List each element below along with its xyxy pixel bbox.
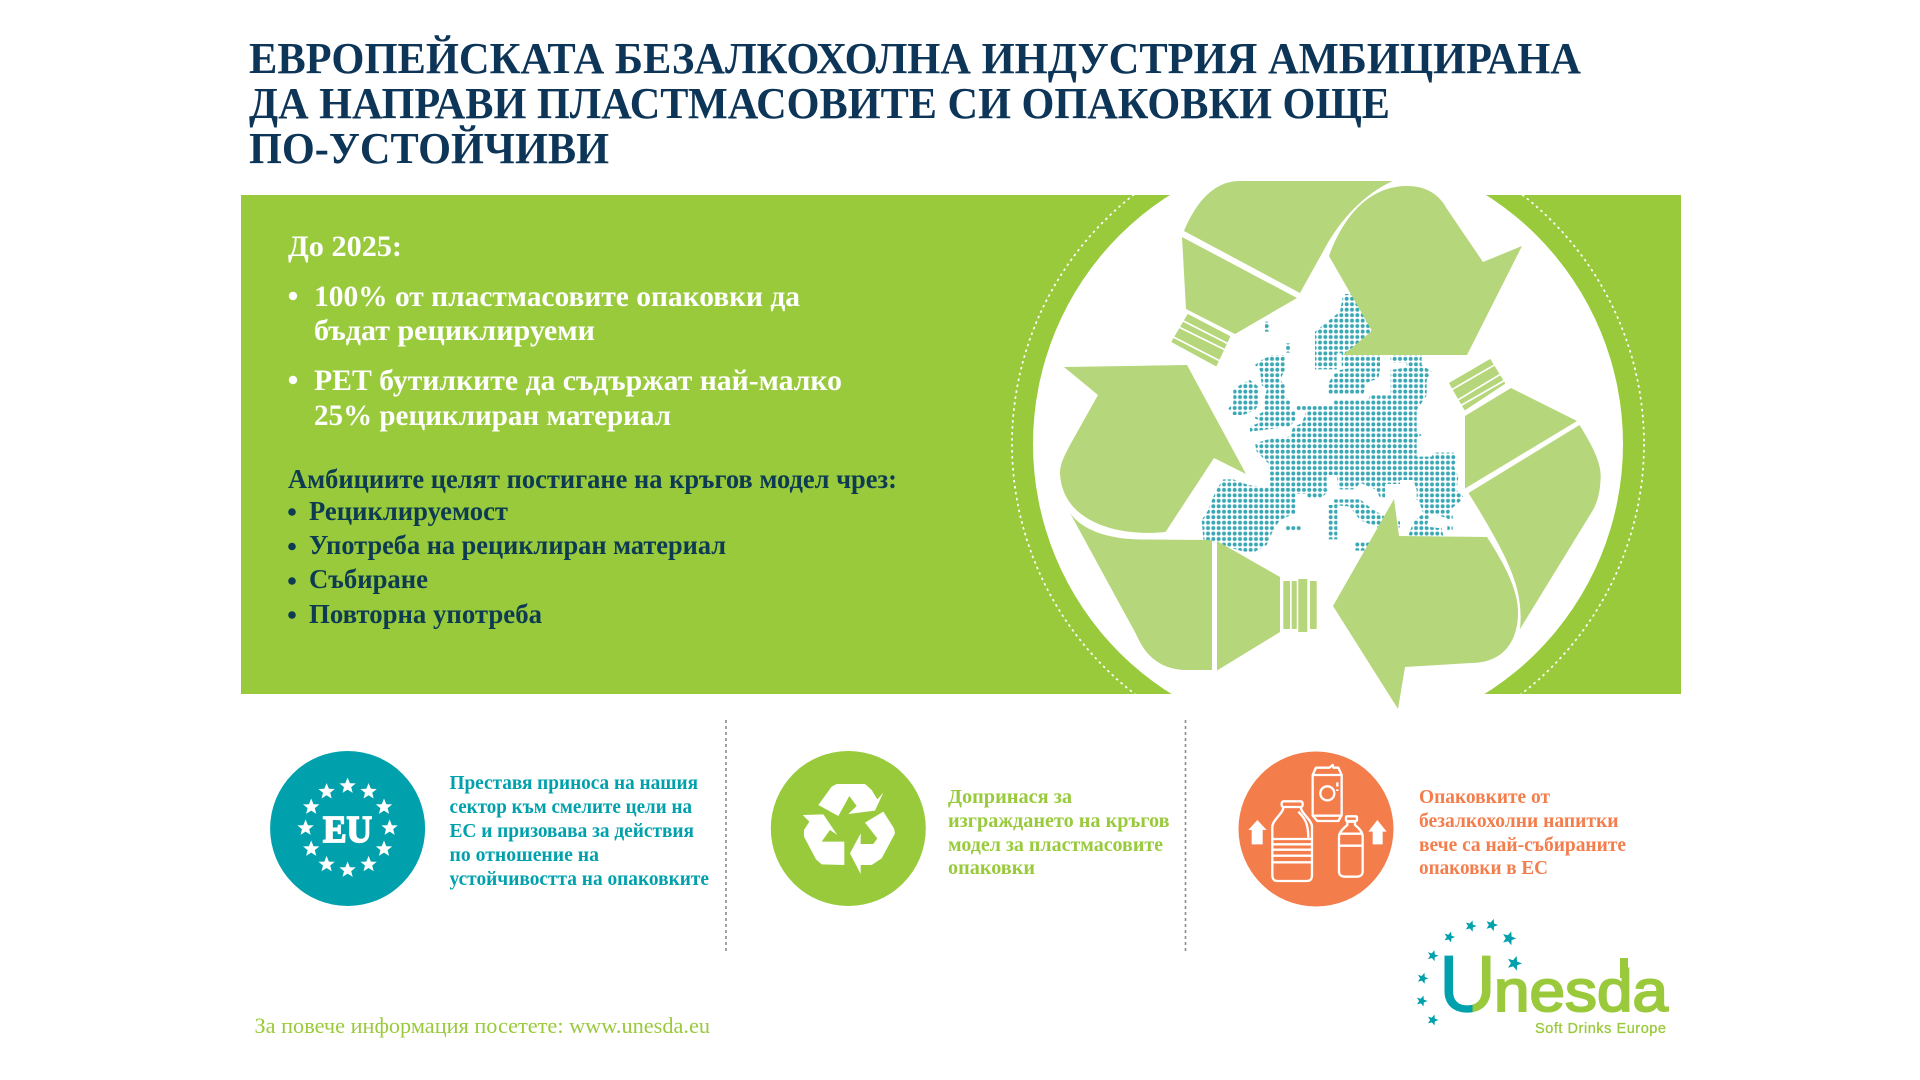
text: EU contribution: устойчивостта на опаковките [450,868,709,890]
arrow top right [1329,186,1522,355]
dotted ring [1011,195,1645,694]
text: circular model: модел за пластмасовите [948,834,1163,856]
divider right [1184,720,1186,954]
title: ЕВРОПЕЙСКАТА БЕЗАЛКОХОЛНА ИНДУСТРИЯ АМБИЦИРАНА [249,34,1581,83]
text: circular model [948,786,1170,879]
circular model list [288,464,897,629]
icon: recycling [771,751,926,906]
text: circular model: опаковки [948,857,1035,879]
circular model list: Рециклируемост [309,496,508,526]
text: EU contribution: сектор към смелите цели на [450,796,692,818]
arrow left [1060,365,1246,533]
text: EU contribution: Преставя приноса на нашия [450,772,698,794]
logo: Unesda: Soft Drinks Europe [1535,1021,1666,1037]
large bottle [1272,801,1312,881]
circular model list: Амбициите целят постигане на кръгов модел чрез: [288,464,897,494]
can [1313,765,1342,821]
white circle [1033,149,1623,739]
text: most collected [1419,786,1626,879]
divider left [725,720,727,954]
dotted map of Europe [1202,294,1463,552]
heading: by 2025: До 2025: [288,230,402,263]
panel: green band with goals [241,195,1681,694]
goals list: бъдат рециклируеми [314,314,595,347]
text: EU contribution: по отношение на [450,844,599,866]
text: most collected: безалкохолни напитки [1419,810,1619,832]
arrow bottom [1333,499,1518,709]
text: EU contribution: ЕС и призовава за действия [450,820,694,842]
goals list [289,280,842,432]
text: most collected: Опаковките от [1419,786,1550,808]
text: circular model: изграждането на кръгов [948,810,1170,832]
circular model list: Събиране [309,564,428,594]
arrow top: bottle [1172,181,1393,365]
logo: Unesda [1415,917,1669,1037]
up arrows [1248,820,1387,844]
circular model list: Повторна употреба [309,599,542,629]
footer link: За повече информация посетете: www.unesda.eu [254,1013,710,1038]
icon: bottles and can [1238,752,1394,906]
goals list: 25% рециклиран материал [314,399,671,432]
goals list: РЕТ бутилките да съдържат най-малко [314,364,842,397]
title [249,34,1581,173]
text: most collected: вече са най-събираните [1419,834,1626,856]
recycling symbol made of bottles [1060,181,1601,709]
title: ДА НАПРАВИ ПЛАСТМАСОВИТЕ СИ ОПАКОВКИ ОЩЕ [249,79,1390,128]
small bottle [1339,816,1363,877]
title: ПО-УСТОЙЧИВИ [249,124,609,173]
icon: EU stars: EU [323,809,372,851]
icon: EU stars [270,751,425,906]
logo: Unesda: nesda [1494,959,1669,1024]
goals list: 100% от пластмасовите опаковки да [314,280,800,313]
text: EU contribution [450,772,709,890]
logo: Unesda: U [1439,939,1496,1028]
arrow bottom left: bottle [1070,513,1317,670]
text: most collected: опаковки в ЕС [1419,857,1548,879]
text: circular model: Допринася за [948,786,1072,808]
circular model list: Употреба на рециклиран материал [309,530,726,560]
arrow right: bottle [1450,360,1601,629]
